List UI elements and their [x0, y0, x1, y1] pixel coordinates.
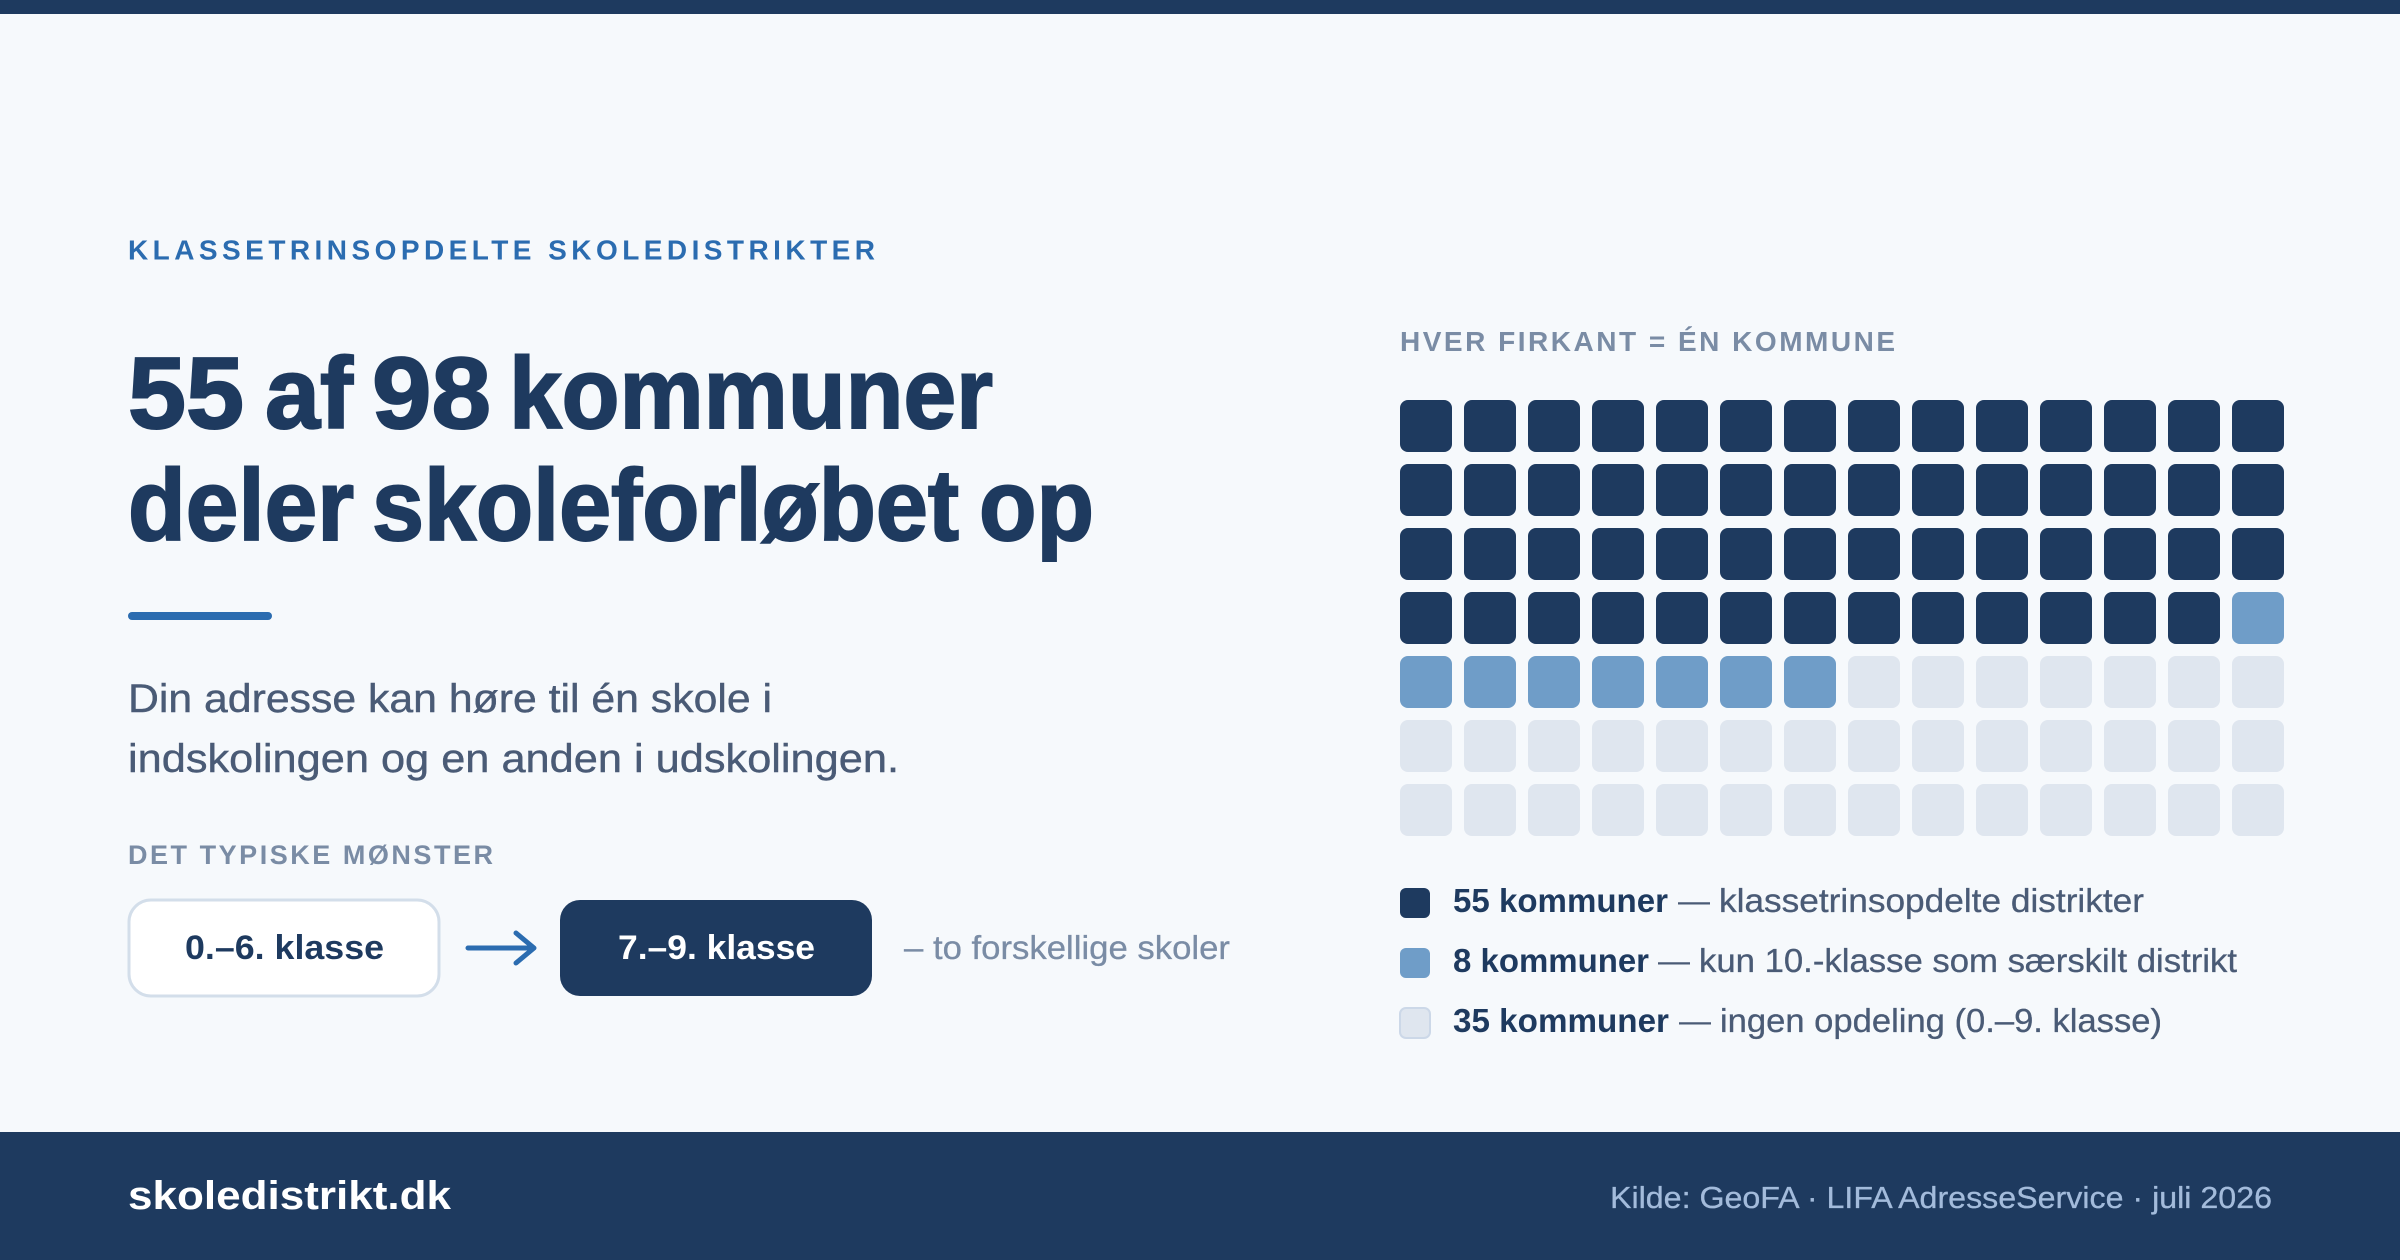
intro text	[128, 677, 899, 781]
legend row: 55 kommuner: —	[1678, 882, 1710, 919]
legend row: 55 kommuner: 55 kommuner	[1453, 882, 1668, 919]
accent rule	[128, 612, 272, 620]
pill: 7.–9. klasse: 7.–9. klasse	[618, 929, 815, 967]
title: af	[265, 338, 353, 450]
footer source: Kilde: GeoFA · LIFA AdresseService · juli 2026	[1610, 1180, 2272, 1215]
intro text: indskolingen og en anden i udskolingen.	[128, 737, 899, 781]
title: skoleforløbet	[372, 450, 959, 562]
footer	[0, 1132, 2400, 1260]
squares: 8 kommuner	[1400, 592, 2284, 708]
legend row: 8 kommuner	[1400, 942, 2237, 979]
eyebrow heading: KLASSETRINSOPDELTE SKOLEDISTRIKTER	[128, 234, 875, 266]
title: 98	[372, 338, 491, 450]
legend row: 55 kommuner	[1400, 882, 2144, 919]
legend row: 8 kommuner: 8 kommuner	[1453, 942, 1649, 979]
title: op	[979, 450, 1094, 562]
pattern note: – to forskellige skoler	[904, 929, 1230, 966]
title	[128, 338, 1094, 562]
pattern label: DET TYPISKE MØNSTER	[128, 840, 493, 870]
pattern flow	[129, 900, 1230, 996]
top bar	[0, 0, 2400, 14]
legend row: 8 kommuner: kun 10.-klasse som særskilt distrikt	[1699, 942, 2237, 979]
legend row: 8 kommuner: —	[1658, 942, 1690, 979]
legend row: 35 kommuner: —	[1679, 1002, 1711, 1039]
waffle chart	[1400, 400, 2284, 836]
squares: 35 kommuner	[1400, 656, 2284, 836]
pill: 0.–6. klasse: 0.–6. klasse	[185, 929, 384, 967]
squares: 55 kommuner	[1400, 400, 2284, 644]
waffle heading: HVER FIRKANT = ÉN KOMMUNE	[1400, 326, 1895, 357]
legend	[1400, 882, 2237, 1039]
title: kommuner	[509, 338, 993, 450]
legend row: 35 kommuner	[1400, 1002, 2162, 1039]
legend row: 35 kommuner: 35 kommuner	[1453, 1002, 1669, 1039]
pill: 7.–9. klasse	[560, 900, 872, 996]
intro text: Din adresse kan høre til én skole i	[128, 677, 772, 721]
arrow	[468, 933, 534, 963]
title: 55	[128, 338, 244, 450]
title: deler	[128, 450, 354, 562]
legend row: 55 kommuner: klassetrinsopdelte distrikter	[1719, 882, 2144, 919]
legend row: 35 kommuner: ingen opdeling (0.–9. klasse)	[1720, 1002, 2162, 1039]
footer brand: skoledistrikt.dk	[128, 1174, 452, 1218]
pill: 0.–6. klasse	[129, 900, 439, 996]
